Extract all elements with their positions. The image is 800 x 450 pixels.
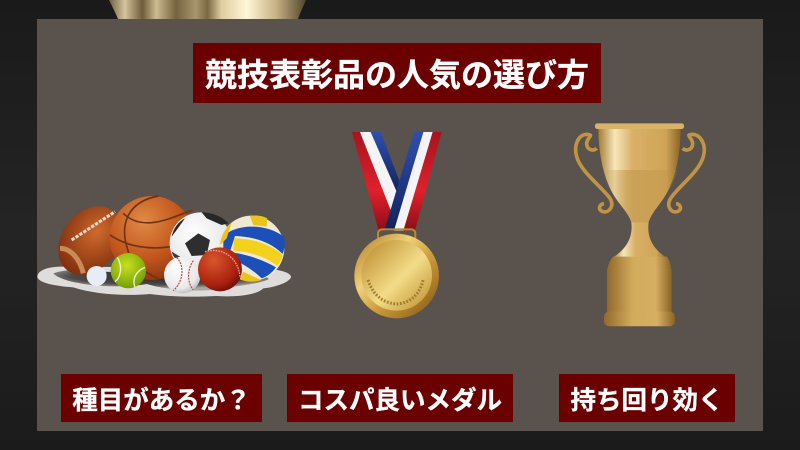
- soccer ball: [170, 212, 232, 274]
- label: medal: コスパ良いメダル: [298, 386, 502, 414]
- football: [45, 194, 135, 287]
- icon: medal with ribbon: [352, 132, 442, 318]
- baseball: [164, 257, 201, 293]
- plate shadow: [37, 267, 291, 297]
- title: [193, 43, 601, 103]
- white ball: [87, 266, 107, 286]
- medal loop: [378, 229, 415, 241]
- base: [607, 269, 672, 314]
- ribbon right: [403, 132, 442, 231]
- rim: [595, 123, 684, 129]
- label: sports: 種目があるか？: [72, 386, 251, 414]
- basketball: [110, 196, 194, 280]
- base shoulder: [607, 257, 671, 270]
- label: trophy: [559, 374, 735, 422]
- handles: [576, 134, 612, 212]
- volleyball: [219, 215, 285, 282]
- title: 競技表彰品の人気の選び方: [205, 57, 589, 93]
- medal disc: [354, 234, 439, 318]
- cup lower shade: [602, 170, 677, 223]
- tennis ball: [111, 253, 146, 288]
- label: trophy: 持ち回り効く: [570, 386, 724, 414]
- icon: gold trophy: [576, 123, 704, 326]
- label: sports: [61, 374, 262, 422]
- stem: [613, 222, 667, 258]
- foot: [604, 312, 675, 326]
- ribbon left: [352, 132, 391, 230]
- cricket ball: [198, 247, 242, 291]
- label: medal: [287, 374, 513, 422]
- icon: trophy top peeking above panel: [109, 0, 306, 19]
- cup bowl: [598, 127, 681, 223]
